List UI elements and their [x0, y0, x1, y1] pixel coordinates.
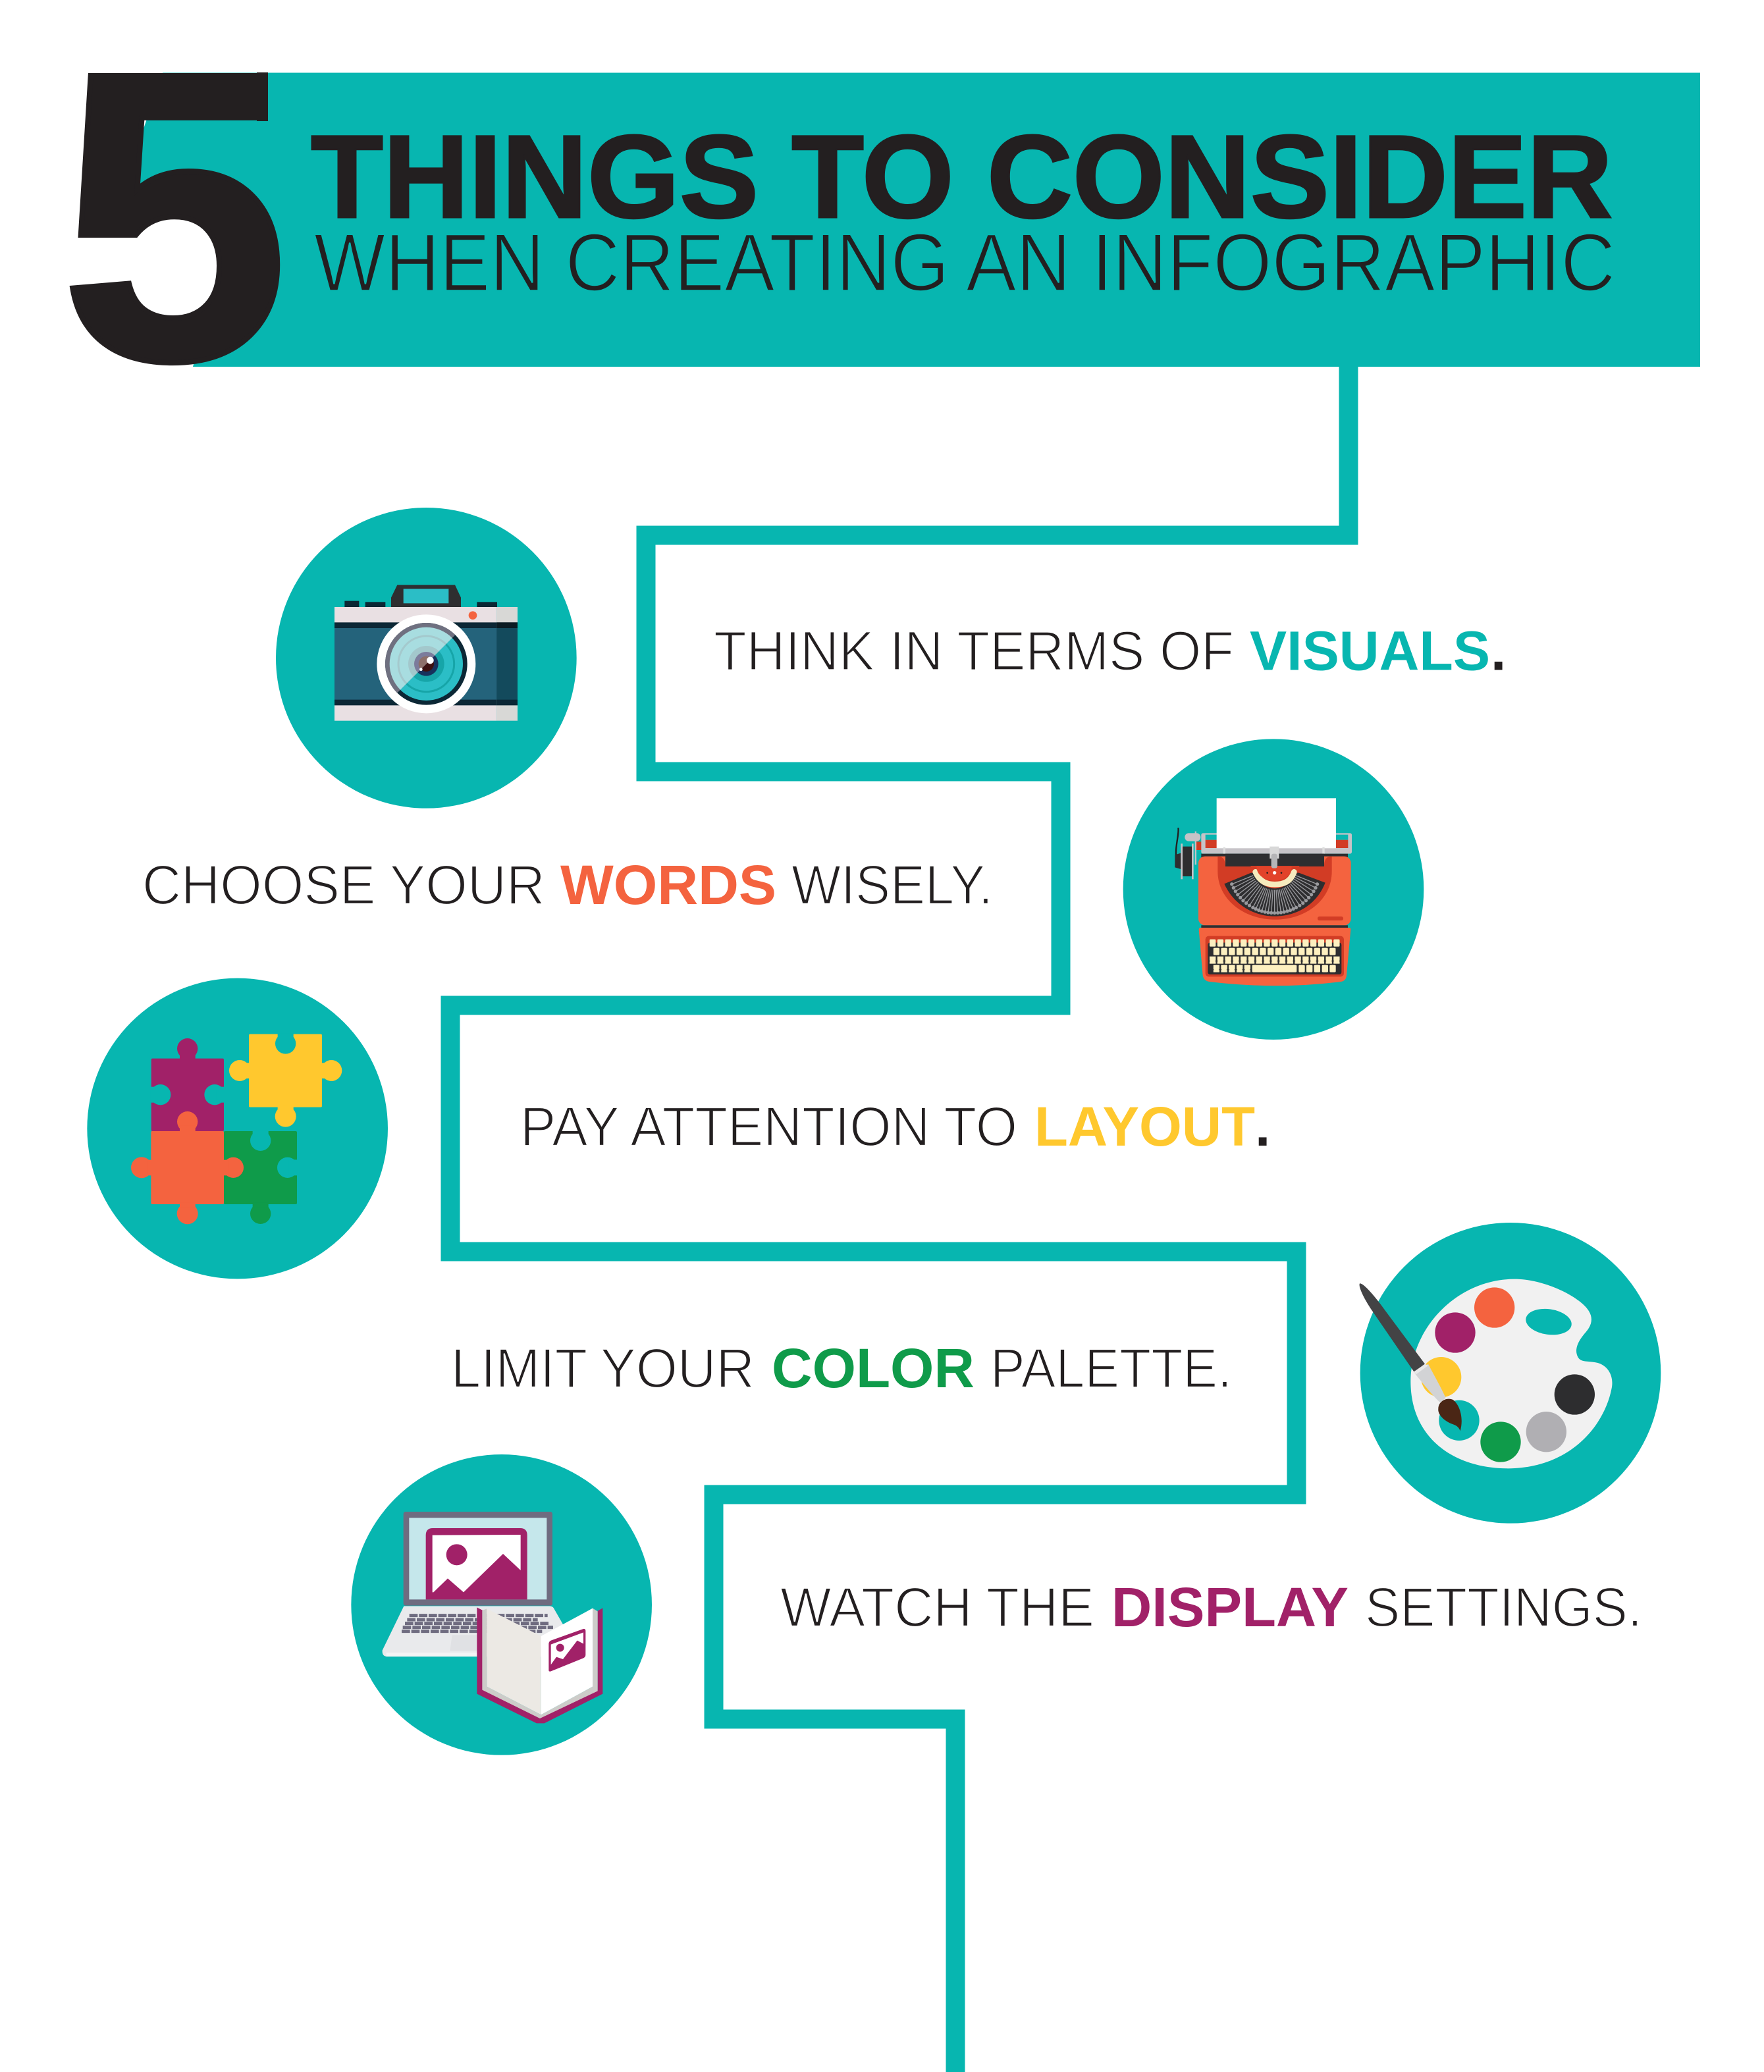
step 3 text: layout: LAYOUT: [1034, 1096, 1255, 1157]
step 2 text: words: CHOOSE YOUR: [142, 854, 545, 916]
step 4 text: color: LIMIT YOUR: [451, 1337, 755, 1399]
banner background: [130, 72, 1700, 367]
step 5 text: display: [780, 1576, 1642, 1638]
big number 5: 5: [60, 0, 289, 446]
step 1 text: visuals: .: [1491, 620, 1506, 682]
icon: camera: [276, 508, 577, 809]
step 4 text: color: [451, 1337, 1232, 1399]
step 3 text: layout: PAY ATTENTION TO: [520, 1096, 1017, 1157]
number 5 bar extension: [257, 72, 268, 121]
step 2 text: words: WORDS: [560, 854, 776, 916]
step 2 text: words: WISELY.: [791, 854, 993, 916]
subtitle: WHEN CREATING AN INFOGRAPHIC: [314, 217, 1615, 308]
step 2 text: words: [142, 854, 993, 916]
step 1 text: visuals: VISUALS: [1250, 620, 1490, 682]
connector path: [450, 367, 1349, 2072]
header banner: [60, 0, 1700, 446]
icon: typewriter: [1123, 739, 1424, 1040]
step 4 text: color: PALETTE.: [990, 1337, 1232, 1399]
step 3 text: layout: .: [1255, 1096, 1270, 1157]
step 1 text: visuals: [714, 620, 1506, 682]
step 3 text: layout: [520, 1096, 1270, 1157]
title: THINGS TO CONSIDER: [311, 111, 1613, 242]
icon: puzzle: [87, 978, 388, 1279]
step 5 text: display: SETTINGS.: [1365, 1576, 1642, 1638]
step 5 text: display: WATCH THE: [780, 1576, 1094, 1638]
step 4 text: color: COLOR: [772, 1337, 975, 1399]
step 5 text: display: DISPLAY: [1111, 1576, 1349, 1638]
step 1 text: visuals: THINK IN TERMS OF: [714, 620, 1234, 682]
icon: palette: [1360, 1223, 1661, 1524]
icon: laptop and book: [351, 1454, 652, 1755]
